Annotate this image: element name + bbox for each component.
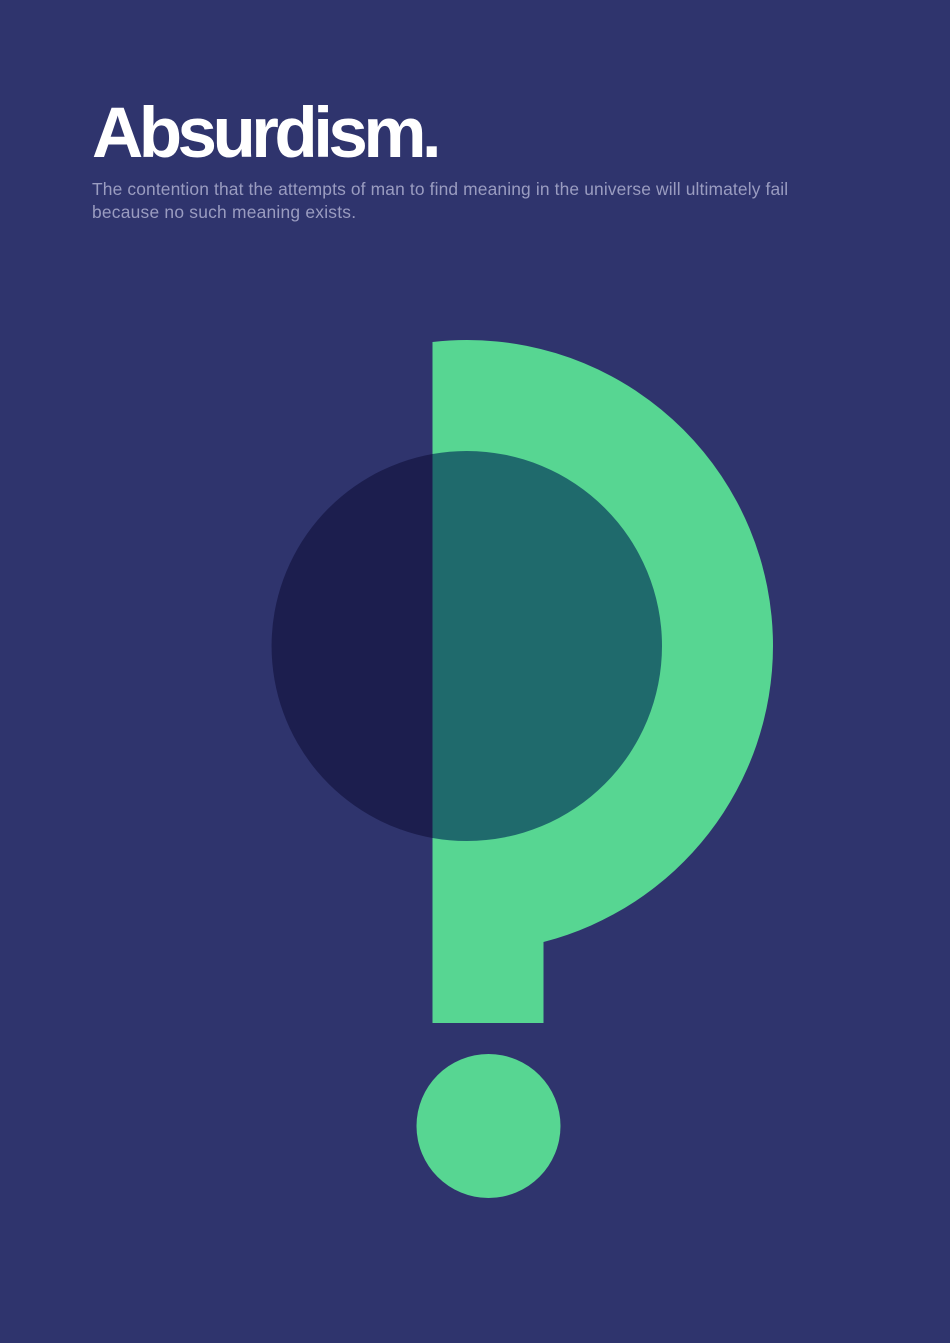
question mark hook [432,340,773,1023]
question mark dot [416,1054,560,1198]
title: Absurdism. [92,94,437,173]
description text: because no such meaning exists. [92,202,356,222]
teal circle right half [432,451,662,841]
description text [92,179,788,222]
description text: The contention that the attempts of man to find meaning in the universe will ultimately fail [92,179,788,199]
dark circle left half [272,454,432,838]
